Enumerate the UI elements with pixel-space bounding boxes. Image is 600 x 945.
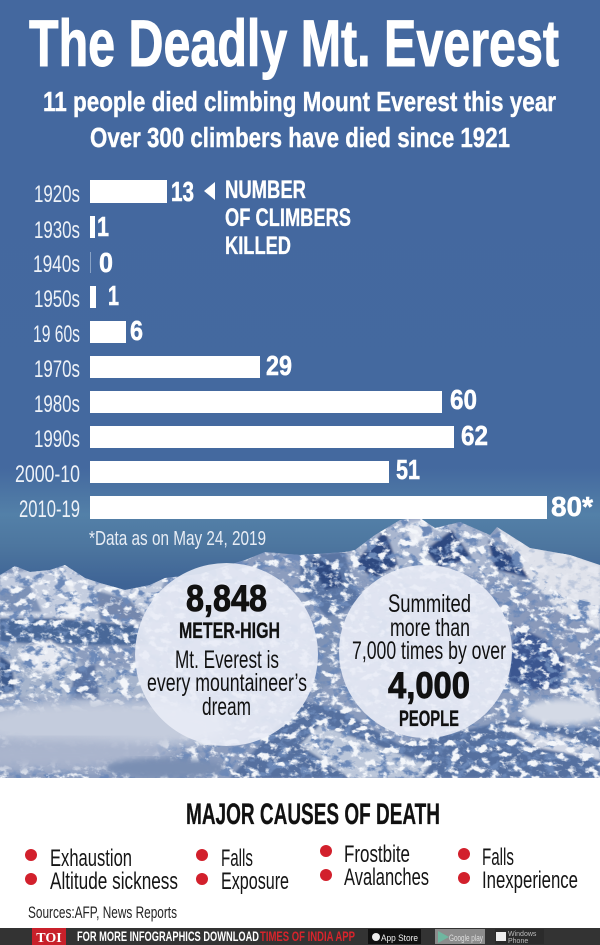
row 2000-10: 2000-10 <box>15 461 80 488</box>
chart legend <box>225 176 351 260</box>
causes column 4 <box>458 844 578 894</box>
row 2000-10 <box>15 454 420 488</box>
callout: summits circle: 4,000 <box>388 665 470 706</box>
causes column 1: Exhaustion <box>50 845 132 872</box>
causes column 4: Falls <box>482 844 514 871</box>
row 1970s: 1970s <box>34 356 80 383</box>
row 1980s <box>34 384 477 418</box>
sources: Sources:AFP, News Reports <box>28 903 177 922</box>
row 1950s: 1950s <box>34 286 80 313</box>
footer app name: TIMES OF INDIA APP <box>260 928 355 944</box>
causes column 3: Avalanches <box>344 864 429 891</box>
badge: Windows Phone <box>495 929 544 945</box>
row 1960s <box>33 315 143 348</box>
callout: summits circle: 7,000 times by over <box>352 637 506 665</box>
callout: height circle: 8,848 <box>186 578 267 619</box>
badge: Windows Phone: Windows <box>508 931 537 938</box>
icon: left-pointing arrow <box>204 182 215 200</box>
callout: summits circle: PEOPLE <box>399 706 459 731</box>
row 1970s: 29 <box>266 350 292 381</box>
subtitle <box>43 86 556 153</box>
callout: height circle: Mt. Everest is <box>175 646 279 674</box>
row 1960s: 19 60s <box>33 321 80 348</box>
mountain photo backdrop <box>0 515 600 778</box>
callout: summits circle: more than <box>390 614 470 642</box>
chart legend: NUMBER <box>225 176 306 204</box>
chart legend: KILLED <box>225 232 291 260</box>
causes column 2: Exposure <box>221 868 289 895</box>
callout: height circle: dream <box>202 693 251 721</box>
heading: MAJOR CAUSES OF DEATH <box>186 798 440 831</box>
causes column 3 <box>320 841 429 891</box>
footnote: *Data as on May 24, 2019 <box>89 528 266 550</box>
row 1920s: 1920s <box>34 181 80 208</box>
footer message: FOR MORE INFOGRAPHICS DOWNLOAD <box>77 928 259 944</box>
row 1920s: 13 <box>171 176 194 207</box>
badge: Google Play <box>435 929 485 944</box>
row 1930s: 1 <box>97 211 109 242</box>
row 1930s: 1930s <box>34 217 80 244</box>
row 1990s <box>34 420 488 453</box>
row 1920s <box>34 176 194 208</box>
badge: App Store: App Store <box>381 933 418 943</box>
row 1990s: 62 <box>461 420 488 451</box>
bar chart: number of climbers killed by decade <box>15 176 593 523</box>
causes column 1 <box>25 845 178 895</box>
causes column 1: Altitude sickness <box>50 868 178 895</box>
row 1990s: 1990s <box>34 426 80 453</box>
callout: height circle: every mountaineer’s <box>147 669 307 697</box>
callout: height circle: METER-HIGH <box>179 618 280 643</box>
row 1940s: 0 <box>99 247 113 278</box>
badge: Google Play: Google play <box>449 933 483 943</box>
row 1980s: 60 <box>450 384 477 415</box>
row 1950s: 1 <box>108 280 119 311</box>
callout: summits circle <box>339 565 512 738</box>
chart legend: OF CLIMBERS <box>225 204 351 232</box>
causes column 2 <box>196 845 289 895</box>
callout: summits circle: Summited <box>388 590 471 618</box>
row 1950s <box>34 280 119 313</box>
badge: App Store <box>368 929 421 944</box>
logo: TOI <box>32 928 66 945</box>
row 2010-19: 80* <box>551 491 593 522</box>
badge: Windows Phone: Phone <box>508 938 528 945</box>
row 1970s <box>34 350 292 383</box>
row 2010-19: 2010-19 <box>19 496 80 523</box>
row 1940s: 1940s <box>33 251 80 278</box>
causes column 2: Falls <box>221 845 253 872</box>
row 1960s: 6 <box>130 315 143 346</box>
row 1980s: 1980s <box>34 391 80 418</box>
callout: height circle <box>135 563 318 746</box>
footer bar <box>0 928 600 945</box>
row 2000-10: 51 <box>396 454 420 485</box>
causes column 3: Frostbite <box>344 841 410 868</box>
row 2010-19 <box>19 491 593 523</box>
panel: major causes of death <box>0 778 600 928</box>
